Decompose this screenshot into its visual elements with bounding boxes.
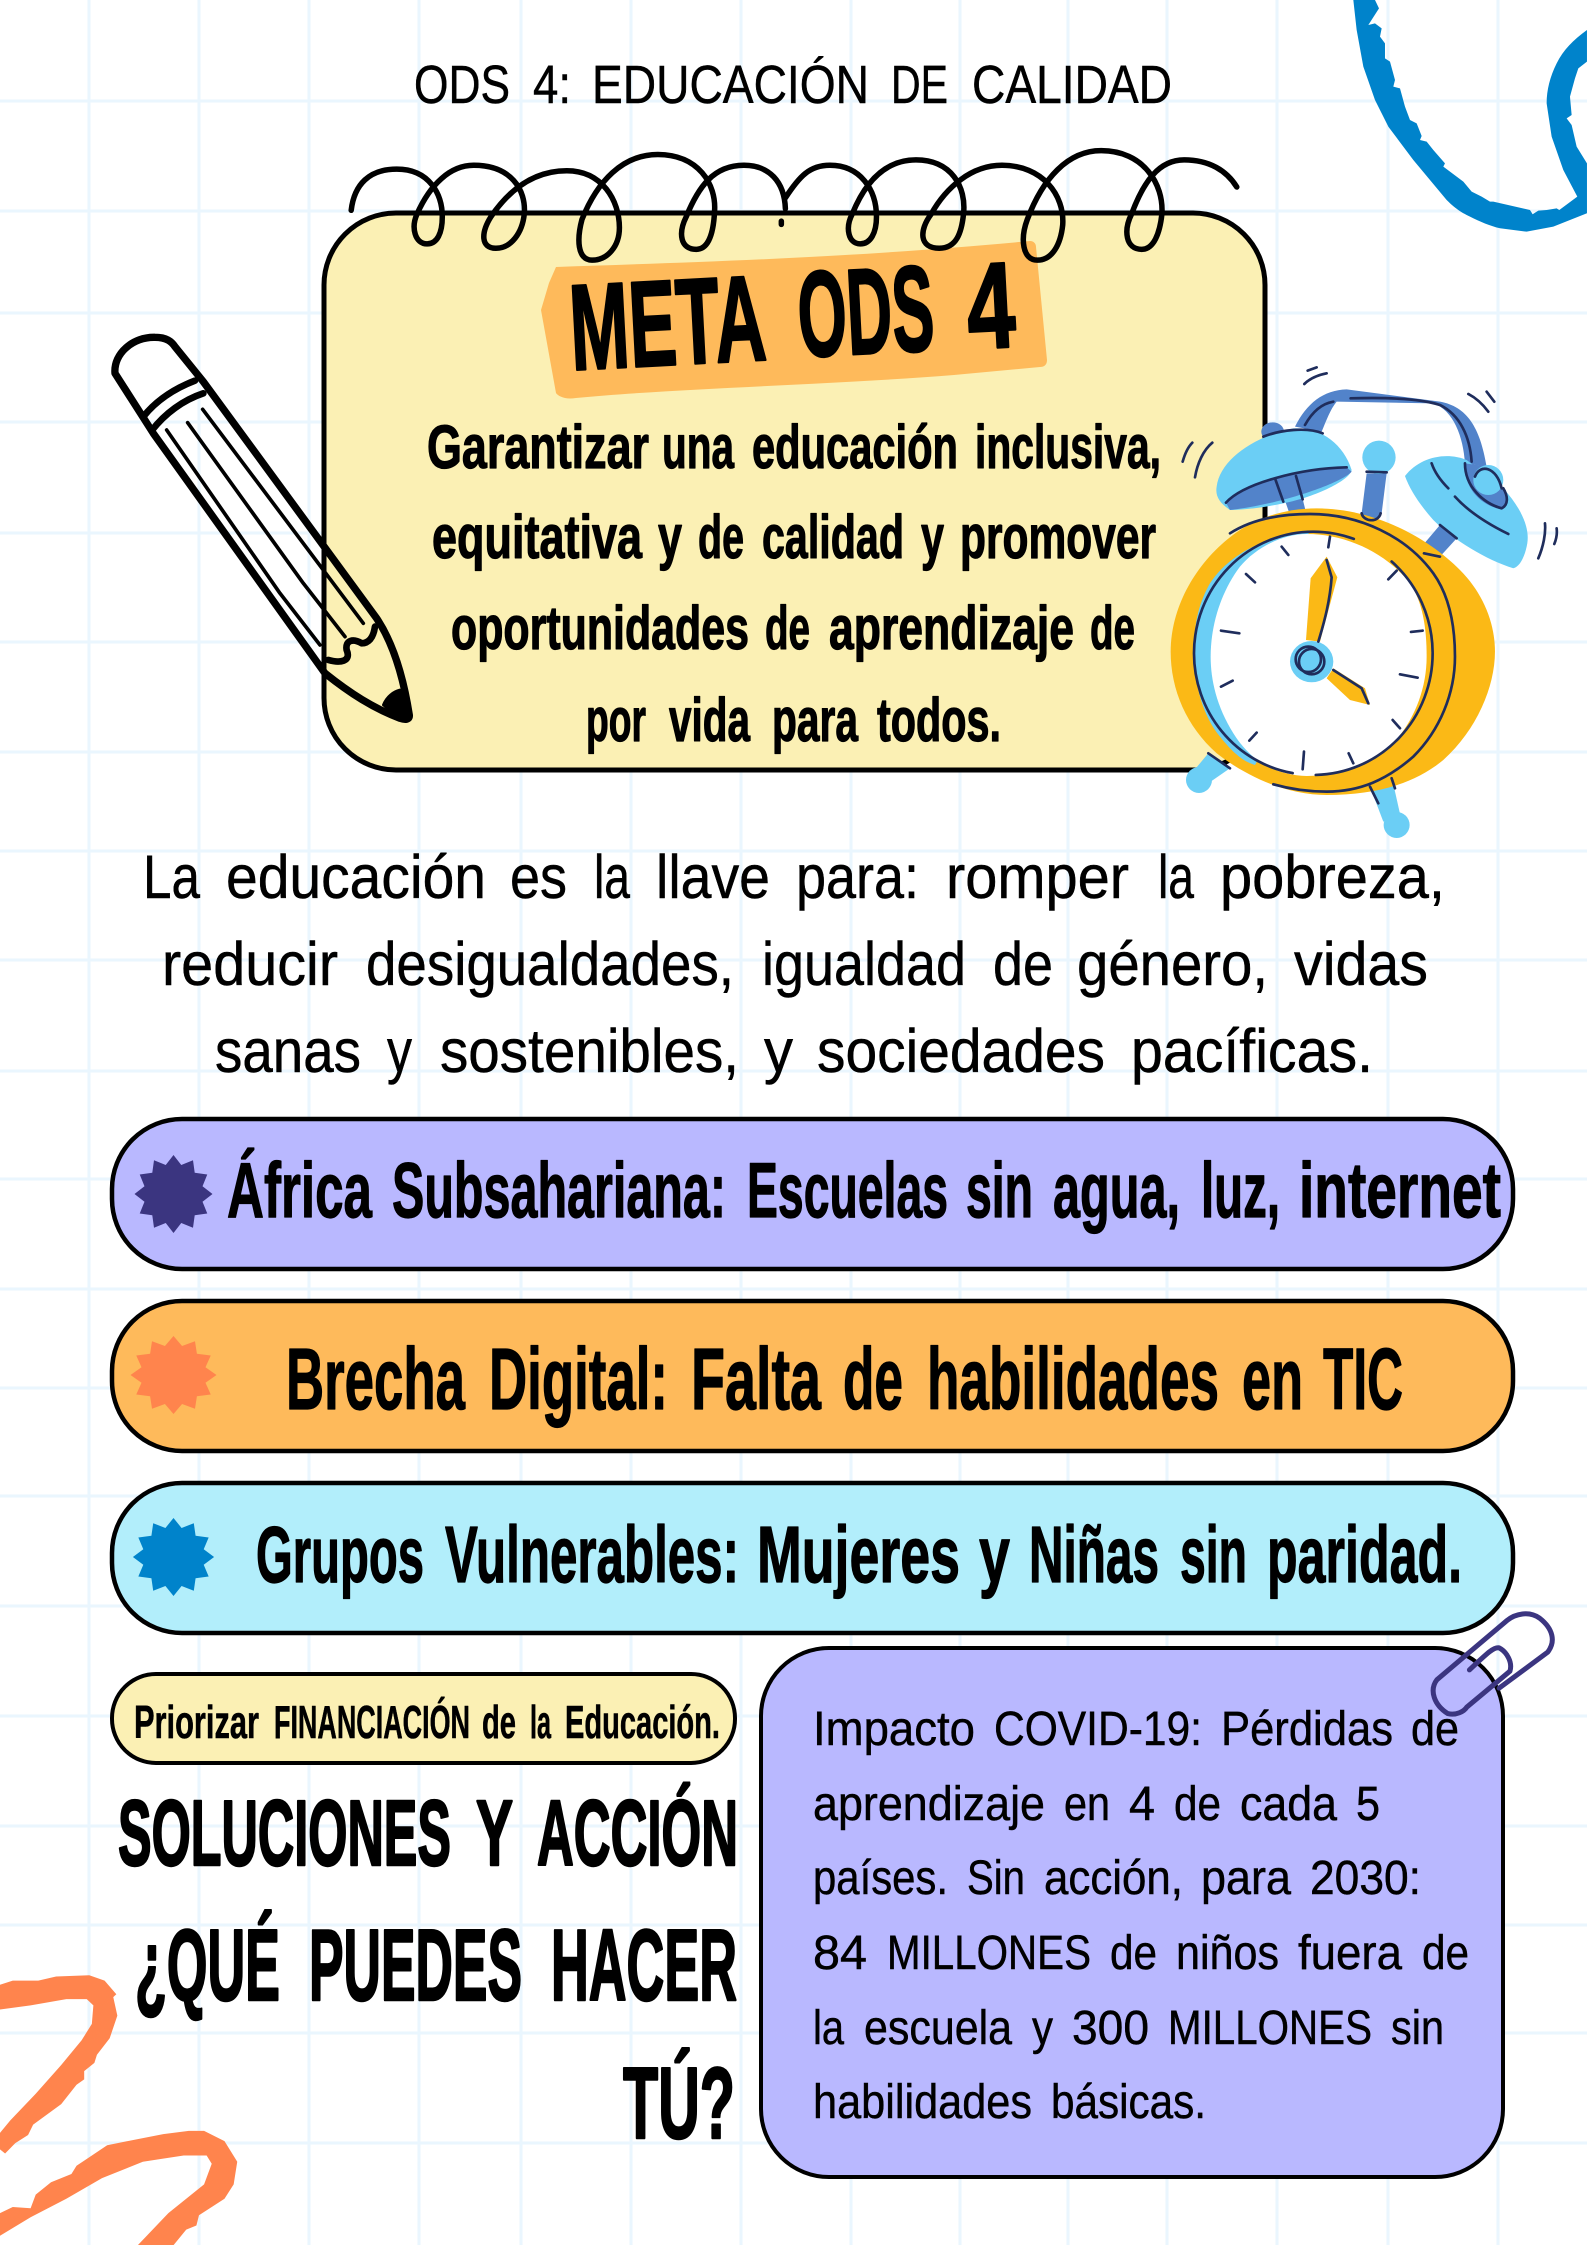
covid impact text: de bbox=[1422, 1927, 1469, 1980]
clock face bbox=[1194, 533, 1310, 765]
paragraph: education is the key: La bbox=[143, 843, 200, 911]
paragraph: education is the key: desigualdades, bbox=[366, 930, 734, 998]
covid impact text: de bbox=[1174, 1778, 1221, 1831]
title: ODS bbox=[414, 55, 510, 115]
covid impact text: y bbox=[1032, 2002, 1053, 2055]
panel: Africa subsahariana pill bbox=[112, 1119, 1513, 1269]
covid impact text: MILLONES bbox=[887, 1927, 1091, 1980]
left bell bbox=[1216, 428, 1352, 510]
panel: financing pill bbox=[112, 1674, 735, 1763]
panel: covid impact bbox=[761, 1648, 1503, 2177]
heading: meta ods 4: ODS bbox=[794, 240, 937, 383]
heading: soluciones y accion: SOLUCIONES bbox=[118, 1781, 451, 1885]
covid impact text: Sin bbox=[967, 1852, 1025, 1905]
goal text: calidad bbox=[762, 503, 904, 571]
panel: financing pill: FINANCIACIÓN bbox=[274, 1696, 470, 1748]
heading: meta ods 4: META bbox=[566, 250, 769, 396]
covid impact text: países. bbox=[813, 1852, 948, 1905]
goal text: aprendizaje bbox=[829, 594, 1074, 662]
icon: pencil bbox=[115, 337, 409, 719]
goal text: y bbox=[658, 503, 682, 571]
goal text: educación bbox=[752, 413, 958, 481]
covid impact text: Impacto bbox=[813, 1703, 975, 1756]
pill text: Brecha bbox=[286, 1331, 465, 1428]
pill text: de bbox=[843, 1331, 903, 1428]
covid impact text: fuera bbox=[1298, 1927, 1402, 1980]
goal text bbox=[427, 413, 1161, 754]
pill text: paridad. bbox=[1267, 1510, 1462, 1599]
goal text: y bbox=[921, 503, 944, 571]
heading: soluciones y accion: PUEDES bbox=[309, 1910, 522, 2022]
title: CALIDAD bbox=[972, 55, 1172, 115]
covid impact text: sin bbox=[1391, 2002, 1444, 2055]
covid impact text: de bbox=[1110, 1927, 1157, 1980]
pill text: Digital: bbox=[489, 1331, 668, 1428]
title: DE bbox=[891, 55, 948, 115]
covid impact text: para bbox=[1201, 1852, 1291, 1905]
blue scribble top right bbox=[1353, 0, 1587, 232]
panel: financing pill: Priorizar bbox=[134, 1696, 259, 1748]
goal text: de bbox=[765, 594, 810, 662]
paragraph: education is the key: romper bbox=[946, 843, 1129, 911]
paragraph: education is the key: educación bbox=[226, 843, 486, 911]
covid impact text: Pérdidas bbox=[1221, 1703, 1393, 1756]
pill text: Vulnerables: bbox=[445, 1510, 739, 1599]
heading: soluciones y accion: TÚ? bbox=[623, 2048, 735, 2160]
spiral binding bbox=[351, 151, 1237, 260]
pill text: habilidades bbox=[927, 1331, 1219, 1428]
covid impact text: MILLONES bbox=[1168, 2002, 1372, 2055]
heading: soluciones y accion: HACER bbox=[551, 1910, 737, 2022]
goal text: de bbox=[698, 503, 744, 571]
pill text: Falta bbox=[691, 1331, 821, 1428]
paragraph: education is the key: llave bbox=[656, 843, 770, 911]
clock feet bbox=[1186, 753, 1410, 838]
panel: notebook card bbox=[324, 151, 1265, 770]
goal text: todos. bbox=[877, 686, 1001, 754]
paragraph: education is the key: es bbox=[510, 843, 567, 911]
paragraph: education is the key: pobreza, bbox=[1220, 843, 1445, 911]
icon: alarm clock bbox=[1171, 367, 1557, 838]
pill text: Subsahariana: bbox=[392, 1146, 726, 1234]
paragraph: education is the key: sanas bbox=[215, 1017, 361, 1085]
icon: orange star bbox=[130, 1336, 216, 1414]
center knob bbox=[1362, 441, 1396, 474]
highlight behind heading bbox=[541, 241, 1047, 399]
paragraph: education is the key: y bbox=[387, 1017, 412, 1085]
clock line details bbox=[1183, 367, 1557, 803]
covid impact text: de bbox=[1411, 1703, 1459, 1756]
covid impact text: 300 bbox=[1072, 2002, 1149, 2055]
goal text: promover bbox=[960, 503, 1156, 571]
covid impact text: 84 bbox=[813, 1927, 867, 1980]
heading: soluciones y accion: ¿QUÉ bbox=[135, 1910, 280, 2022]
pill text: Grupos bbox=[256, 1510, 424, 1599]
pill text: luz, bbox=[1201, 1146, 1280, 1234]
covid impact text: niños bbox=[1176, 1927, 1279, 1980]
covid impact text bbox=[813, 1703, 1469, 2129]
paragraph: education is the key: de bbox=[993, 930, 1053, 998]
pill text: agua, bbox=[1053, 1146, 1180, 1234]
paragraph: education is the key: sociedades bbox=[817, 1017, 1105, 1085]
covid impact text: escuela bbox=[864, 2002, 1012, 2055]
pill text: internet bbox=[1299, 1146, 1501, 1234]
goal text: por bbox=[586, 686, 646, 754]
panel: financing pill: Educación. bbox=[565, 1696, 720, 1748]
icon: paperclip bbox=[1433, 1614, 1552, 1714]
title: EDUCACIÓN bbox=[592, 55, 869, 115]
pill text: Escuelas bbox=[747, 1146, 948, 1234]
icon: indigo star bbox=[134, 1155, 212, 1233]
covid impact text: básicas. bbox=[1051, 2076, 1206, 2129]
goal text: vida bbox=[669, 686, 751, 754]
pill text: y bbox=[979, 1510, 1010, 1599]
title: 4: bbox=[533, 55, 571, 115]
paragraph: education is the key: género, bbox=[1077, 930, 1268, 998]
covid impact text: cada bbox=[1240, 1778, 1337, 1831]
covid impact text: en bbox=[1064, 1778, 1110, 1831]
paragraph: education is the key: vidas bbox=[1294, 930, 1428, 998]
goal text: para bbox=[772, 686, 859, 754]
heading: meta ods 4: 4 bbox=[963, 237, 1018, 375]
paragraph: education is the key bbox=[143, 843, 1445, 1085]
heading: soluciones y accion: Y bbox=[476, 1781, 513, 1885]
covid impact text: 4 bbox=[1129, 1778, 1155, 1831]
pill text: en bbox=[1242, 1331, 1303, 1428]
paragraph: education is the key: y bbox=[764, 1017, 793, 1085]
paragraph: education is the key: igualdad bbox=[762, 930, 966, 998]
pill text bbox=[286, 1331, 1403, 1428]
right bell bbox=[1405, 456, 1528, 568]
covid impact text: habilidades bbox=[813, 2076, 1032, 2129]
covid impact text: 2030: bbox=[1310, 1852, 1421, 1905]
covid impact text: acción, bbox=[1044, 1852, 1183, 1905]
pill text: Niñas bbox=[1029, 1510, 1159, 1599]
panel: financing pill: la bbox=[530, 1696, 551, 1748]
bell handle and stems bbox=[1261, 389, 1487, 559]
pill text bbox=[227, 1146, 1501, 1234]
panel: grupos vulnerables pill bbox=[112, 1483, 1513, 1633]
covid impact text: la bbox=[813, 2002, 844, 2055]
paragraph: education is the key: la bbox=[594, 843, 630, 911]
covid impact text: COVID-19: bbox=[994, 1703, 1202, 1756]
pill text: Mujeres bbox=[757, 1510, 960, 1599]
paragraph: education is the key: la bbox=[1158, 843, 1194, 911]
covid impact text: aprendizaje bbox=[813, 1778, 1045, 1831]
pill text: África bbox=[227, 1146, 372, 1234]
goal text: inclusiva, bbox=[975, 413, 1161, 481]
heading: soluciones y accion bbox=[118, 1781, 738, 2160]
goal text: Garantizar bbox=[427, 413, 649, 481]
clock body bbox=[1171, 508, 1495, 795]
icon: blue star bbox=[133, 1518, 214, 1596]
goal text: oportunidades bbox=[451, 594, 749, 662]
covid impact text: 5 bbox=[1356, 1778, 1380, 1831]
title bbox=[414, 55, 1172, 115]
paragraph: education is the key: sostenibles, bbox=[440, 1017, 739, 1085]
panel: brecha digital pill bbox=[112, 1301, 1513, 1451]
panel: financing pill: de bbox=[482, 1696, 516, 1748]
paragraph: education is the key: pacíficas. bbox=[1131, 1017, 1373, 1085]
pill text: sin bbox=[966, 1146, 1033, 1234]
goal text: una bbox=[662, 413, 735, 481]
pill text: TIC bbox=[1323, 1331, 1403, 1428]
goal text: equitativa bbox=[432, 503, 643, 571]
paragraph: education is the key: para: bbox=[796, 843, 919, 911]
pill text: sin bbox=[1180, 1510, 1247, 1599]
heading: soluciones y accion: ACCIÓN bbox=[537, 1781, 738, 1885]
pill text bbox=[256, 1510, 1462, 1599]
paragraph: education is the key: reducir bbox=[162, 930, 338, 998]
goal text: de bbox=[1090, 594, 1135, 662]
clock hands bbox=[1306, 557, 1370, 705]
orange scribbles bottom left bbox=[0, 1975, 237, 2245]
